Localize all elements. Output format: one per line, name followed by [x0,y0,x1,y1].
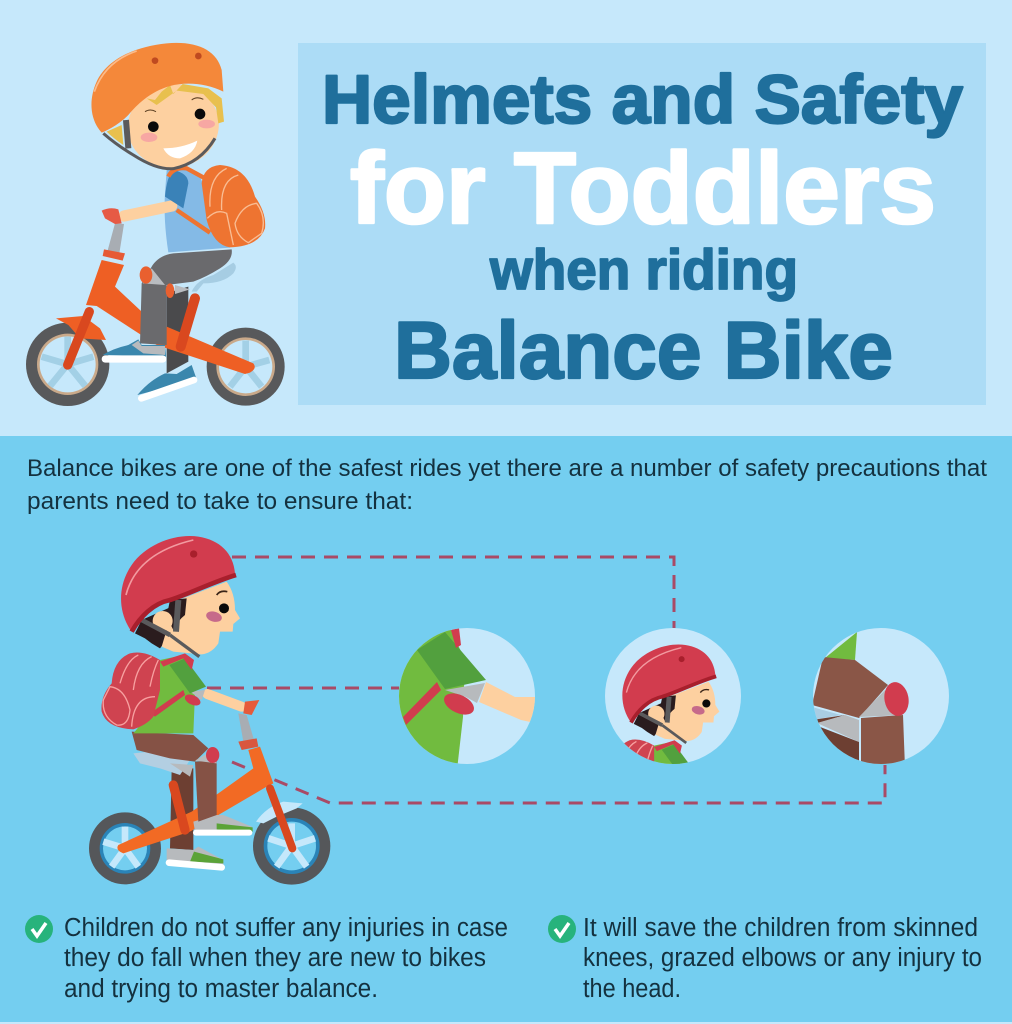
backpack straps [150,653,194,717]
bullet text left: Children do not suffer any injuries in case [64,914,508,942]
backpack straps [168,168,210,233]
bullet text left [64,914,508,1003]
seat [133,752,190,775]
seat [192,263,236,292]
orange helmet [91,43,223,133]
bike frame [117,747,273,853]
sleeve [169,658,206,693]
head [120,76,227,176]
stem [238,713,254,742]
rear wheel [89,812,161,884]
hand grip [102,208,122,224]
arm [124,206,172,216]
title: Balance Bike [394,306,893,396]
bullet text right [583,914,982,1003]
far leg [167,287,188,373]
dashed connector: elbow [207,686,399,690]
seat post [173,785,185,830]
bike frame [86,260,255,374]
sleeve [165,170,188,208]
head collar [103,249,125,261]
fender [56,316,106,340]
front wheel [253,807,330,885]
bullet text left: they do fall when they are new to bikes [64,944,486,972]
hair [135,600,187,648]
intro text: Balance bikes are one of the safest rides yet there are a number of safety precautions that [27,455,987,482]
title [322,61,963,396]
backpack [202,165,265,247]
circle: elbow pad close-up [399,628,535,770]
red helmet [121,536,236,632]
collar [238,738,258,750]
check icon right [548,915,576,943]
hair front [167,598,187,630]
fork [68,312,89,365]
main panel background [0,436,1012,1022]
far shoe [137,365,197,395]
bullet text right: the head. [583,975,681,1003]
hair [107,84,224,145]
seat post [181,298,195,347]
near leg [140,249,232,345]
handlebar stem [107,223,124,253]
intro text [27,455,987,515]
front wheel [207,328,285,406]
elbow pad [183,690,205,708]
title: Helmets and Safety [322,61,963,138]
bullet text right: It will save the children from skinned [583,914,978,942]
title: for Toddlers [350,133,936,245]
near shoe [103,339,166,357]
title panel [298,43,986,405]
shirt [165,169,230,252]
near shoe [193,815,252,832]
bullet text left: and trying to master balance. [64,975,378,1003]
title: when riding [489,238,798,302]
strap [142,600,199,657]
fender [256,802,303,823]
far shoe [167,847,223,867]
bullet text right: knees, grazed elbows or any injury to [583,944,982,972]
knee pad [170,747,219,777]
intro text: parents need to take to ensure that: [27,488,413,515]
near leg [195,760,217,822]
illustration: boy with orange helmet on balance bike [26,43,285,406]
circle: helmet close-up [605,628,741,764]
header background [0,0,1012,436]
circle: knee pad close-up [812,628,949,768]
thigh [132,732,208,762]
illustration: boy with red helmet on balance bike [89,536,330,885]
face details [205,591,229,624]
dashed connector: helmet [232,557,674,628]
knee pads [140,266,190,298]
check icon left [25,915,53,943]
ear [153,611,173,631]
backpack [101,652,160,729]
rear wheel [26,323,109,406]
face details [141,98,215,158]
front fork [270,788,292,848]
far leg [170,768,193,850]
shirt [133,655,195,733]
arm [207,694,242,707]
chin strap [103,120,215,169]
dashed connector: knee [232,762,885,803]
hand grip [243,700,259,715]
head [162,582,240,654]
